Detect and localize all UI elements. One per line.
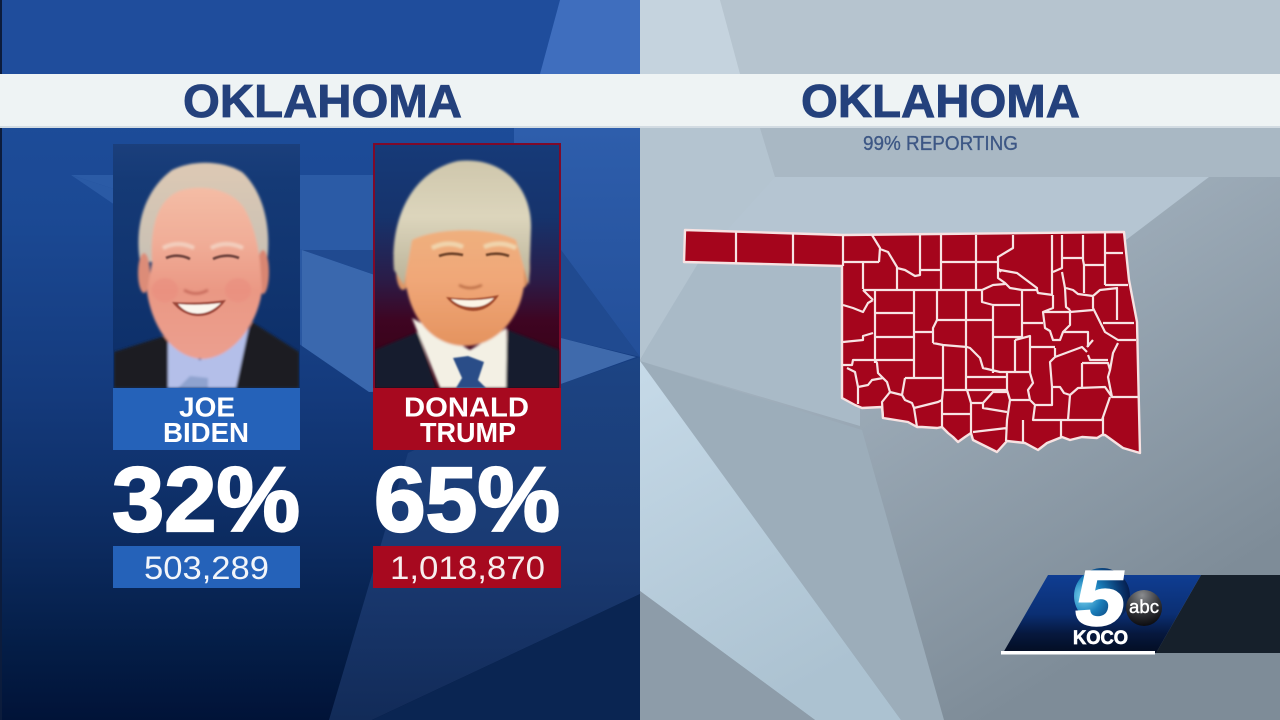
- votes: Trump: 1,018,870: [390, 550, 545, 586]
- logo blue parallelogram: [1003, 575, 1201, 653]
- text: 99% reporting: 99% REPORTING: [863, 133, 1018, 155]
- name box: Donald Trump: [373, 388, 561, 450]
- votes: Trump: [373, 546, 561, 588]
- panel: left blue background: [0, 0, 640, 720]
- logo abc badge: abc: [1129, 597, 1159, 617]
- name box: Donald Trump: TRUMP: [420, 417, 516, 448]
- station logo: KOCO 5 abc: [1001, 554, 1280, 654]
- name box: Donald Trump: DONALD: [404, 392, 529, 422]
- title band: [0, 74, 1280, 128]
- heading: right Oklahoma: OKLAHOMA: [801, 75, 1080, 127]
- logo KOCO wordmark: KOCO: [1073, 628, 1128, 649]
- heading: left Oklahoma: OKLAHOMA: [183, 75, 462, 127]
- logo underline: [1001, 651, 1155, 654]
- logo dark bar: [1156, 575, 1280, 653]
- logo globe: [1074, 568, 1130, 624]
- portrait: Joe Biden: [113, 144, 300, 388]
- percentage: Trump 65%: 65%: [374, 449, 560, 551]
- votes: Biden: [113, 546, 300, 588]
- portrait: Donald Trump: [374, 144, 560, 389]
- votes: Biden: 503,289: [144, 550, 269, 586]
- logo abc badge: [1126, 590, 1162, 626]
- name box: Joe Biden: [113, 388, 300, 450]
- logo numeral 5: 5: [1070, 554, 1132, 642]
- name box: Joe Biden: JOE: [179, 392, 235, 422]
- panel: right grey background: [640, 0, 1280, 720]
- name box: Joe Biden: BIDEN: [163, 417, 249, 448]
- map: Oklahoma counties: [684, 230, 1140, 453]
- percentage: Biden 32%: 32%: [112, 449, 300, 551]
